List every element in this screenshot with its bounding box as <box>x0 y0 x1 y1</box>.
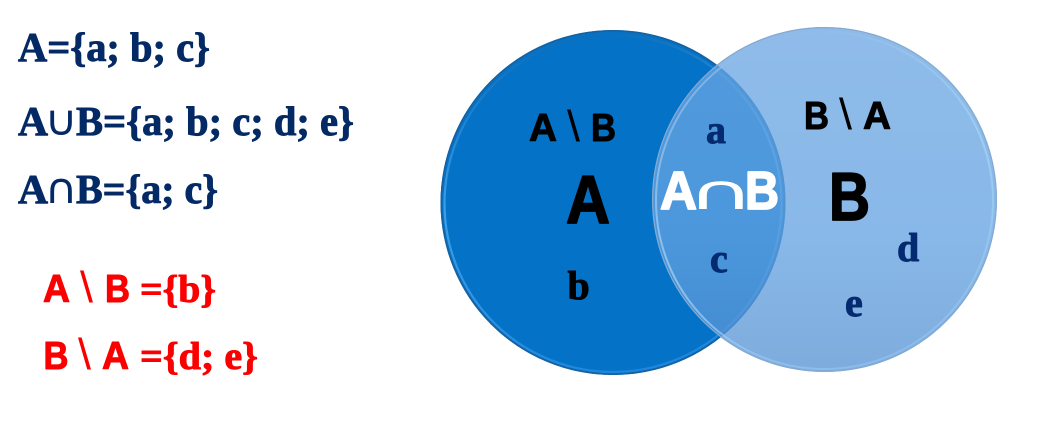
label: intersection <box>660 161 779 221</box>
element a: a <box>706 107 726 152</box>
label: B minus A: B <box>804 95 829 138</box>
formula: set A: A={a; b; c} <box>18 24 210 70</box>
venn diagram <box>440 27 997 375</box>
label: intersection: ∩ <box>688 165 754 221</box>
element d: d <box>897 225 919 270</box>
label: intersection: A <box>660 161 697 221</box>
label: A minus B: \ <box>567 102 581 151</box>
formula: B minus A: \ <box>78 330 92 379</box>
label: B minus A: \ <box>839 90 853 139</box>
formula: A minus B: B <box>105 268 130 311</box>
label: A minus B <box>529 102 616 151</box>
label: A minus B: A <box>529 107 557 150</box>
label: set A: A <box>566 162 610 238</box>
label: B minus A: A <box>863 95 891 138</box>
label: A minus B: B <box>591 107 616 150</box>
formula: A minus B <box>43 263 216 312</box>
label: B minus A <box>804 90 891 139</box>
formula: B minus A: B <box>44 335 68 378</box>
element c: c <box>710 236 728 281</box>
element b: b <box>568 263 590 308</box>
formula: A minus B: \ <box>80 263 94 312</box>
formula: union: A <box>18 98 48 144</box>
set formulas <box>18 24 354 379</box>
formula: A minus B: ={b} <box>140 268 216 311</box>
formula: B minus A: A <box>102 335 129 378</box>
formula: intersection: B={a; c} <box>76 166 218 212</box>
formula: A minus B: A <box>43 268 70 311</box>
formula: B minus A: ={d; e} <box>140 335 258 378</box>
circle B <box>652 27 997 372</box>
formula: union: B={a; b; c; d; e} <box>76 98 354 144</box>
circle A <box>440 30 786 375</box>
formula: union: ∪ <box>44 96 78 145</box>
label: set B: B <box>829 159 870 235</box>
formula: intersection <box>18 164 218 213</box>
formula: intersection: ∩ <box>44 164 78 213</box>
formula: intersection: A <box>18 166 48 212</box>
element e: e <box>845 280 863 325</box>
formula: B minus A <box>44 330 258 379</box>
label: intersection: B <box>745 161 779 221</box>
